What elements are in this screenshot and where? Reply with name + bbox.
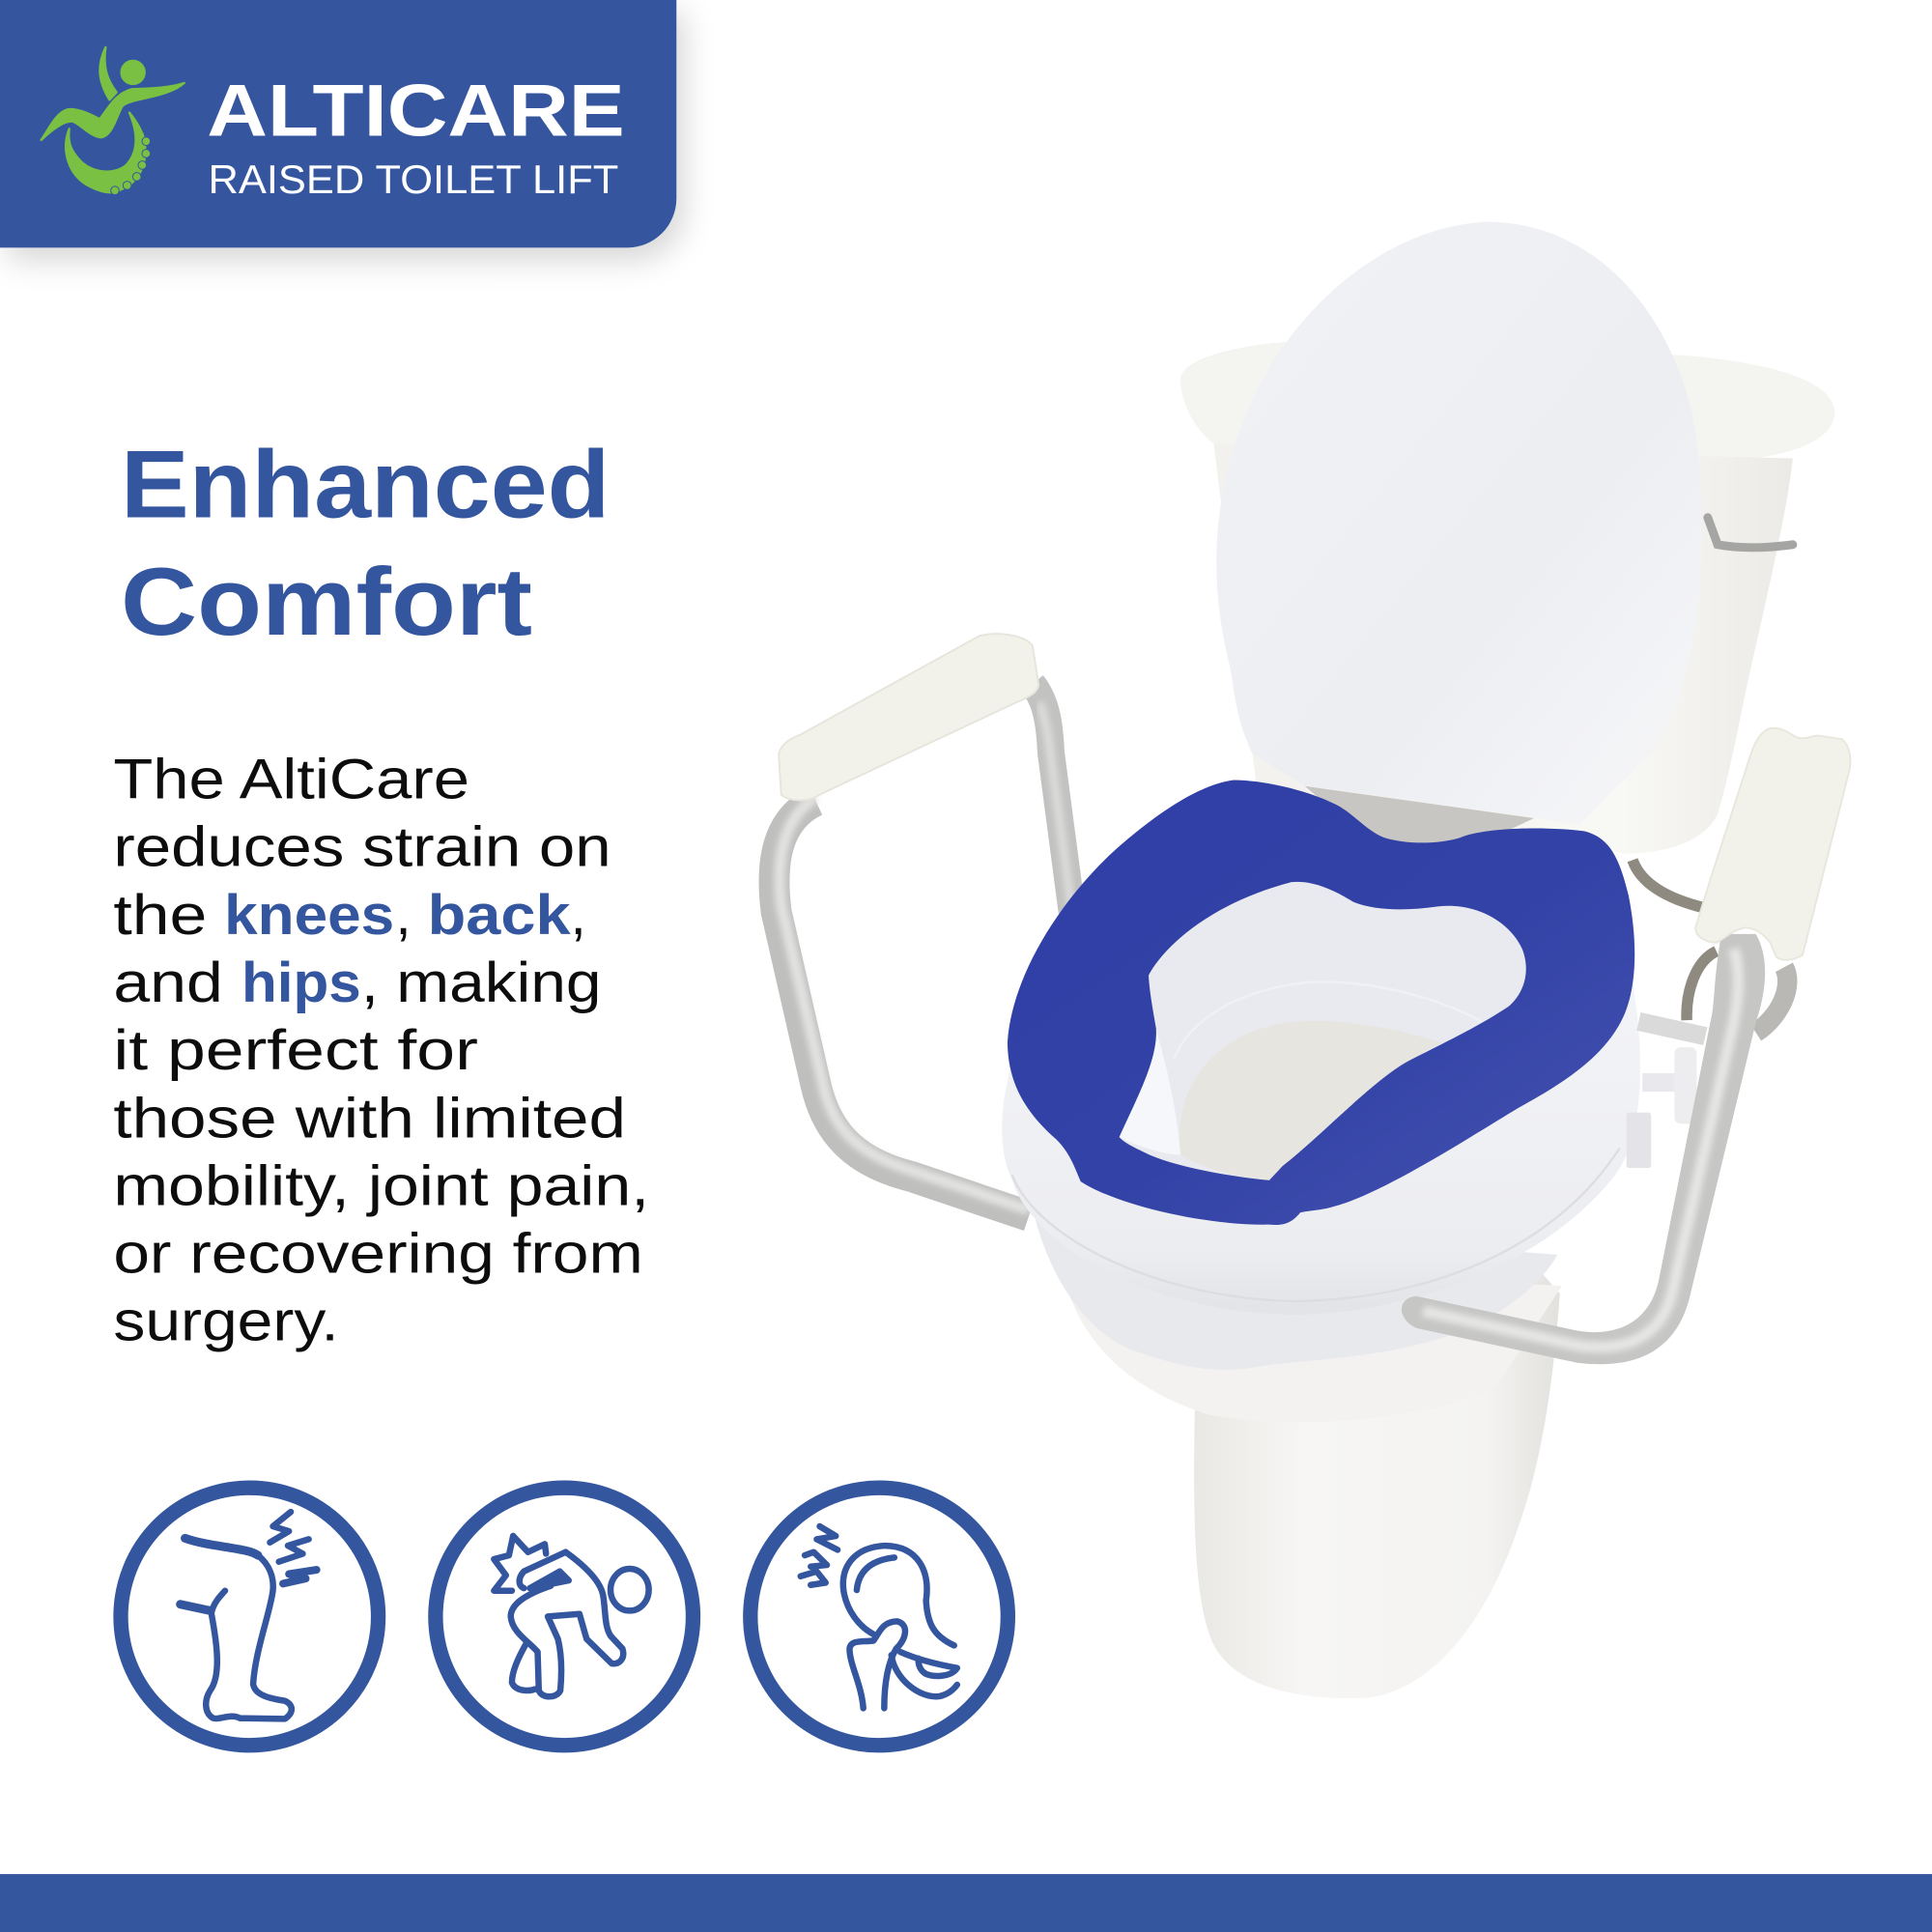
brand name: ALTICARE: [207, 70, 625, 152]
seat lid: [1216, 222, 1702, 824]
body text: hips: [242, 952, 361, 1014]
body text: knees: [224, 884, 394, 947]
icon: back pain: [436, 1488, 693, 1746]
bottom band: [0, 1874, 1932, 1932]
body text: and: [113, 952, 223, 1014]
icon: knee pain: [121, 1488, 379, 1746]
seat assembly: [1002, 781, 1640, 1422]
hinge bar: [1305, 786, 1534, 850]
body text: The AltiCare: [113, 749, 469, 811]
flush handle: [1708, 518, 1793, 548]
body text: reduces strain on: [113, 816, 611, 879]
right arm pad: [1695, 728, 1850, 960]
body text: it perfect for: [113, 1019, 478, 1082]
left arm front tube: [774, 797, 1029, 1216]
product photo: raised toilet with arms: [774, 222, 1850, 1698]
logo icon: [42, 47, 185, 195]
heading: [121, 432, 610, 656]
body text: , making: [361, 952, 601, 1014]
bowl top: [1061, 1264, 1562, 1422]
toilet tank: [1213, 443, 1793, 854]
body text: surgery.: [113, 1291, 339, 1353]
riser skirt: [1035, 1215, 1557, 1370]
heading: Enhanced: [121, 432, 610, 539]
body text: [113, 749, 649, 1353]
header panel: [0, 0, 676, 247]
riser rim: [1002, 984, 1640, 1315]
left arm pad: [779, 634, 1038, 800]
icon: hip pain: [751, 1488, 1008, 1746]
seat opening: [1120, 882, 1526, 1180]
body text: back: [428, 884, 571, 947]
white wedge: [1120, 1029, 1180, 1155]
body text: those with limited: [113, 1087, 626, 1150]
inner lip highlight: [1174, 981, 1482, 1060]
blue seat pad: [1008, 781, 1634, 1225]
toilet tank lid: [1180, 341, 1834, 461]
body text: ,: [571, 884, 586, 947]
right arm tube: [1402, 934, 1787, 1364]
body text: mobility, joint pain,: [113, 1154, 649, 1217]
body text: or recovering from: [113, 1223, 643, 1286]
adjustment clamp: [1627, 1021, 1705, 1168]
body text: ,: [395, 884, 412, 947]
water hose: [1633, 860, 1717, 1020]
left arm rear tube: [1033, 684, 1072, 912]
body text: the: [113, 884, 207, 947]
toilet pedestal: [1194, 1257, 1560, 1698]
heading: Comfort: [121, 549, 532, 656]
product name: RAISED TOILET LIFT: [209, 156, 618, 202]
bowl interior: [1179, 1021, 1442, 1180]
